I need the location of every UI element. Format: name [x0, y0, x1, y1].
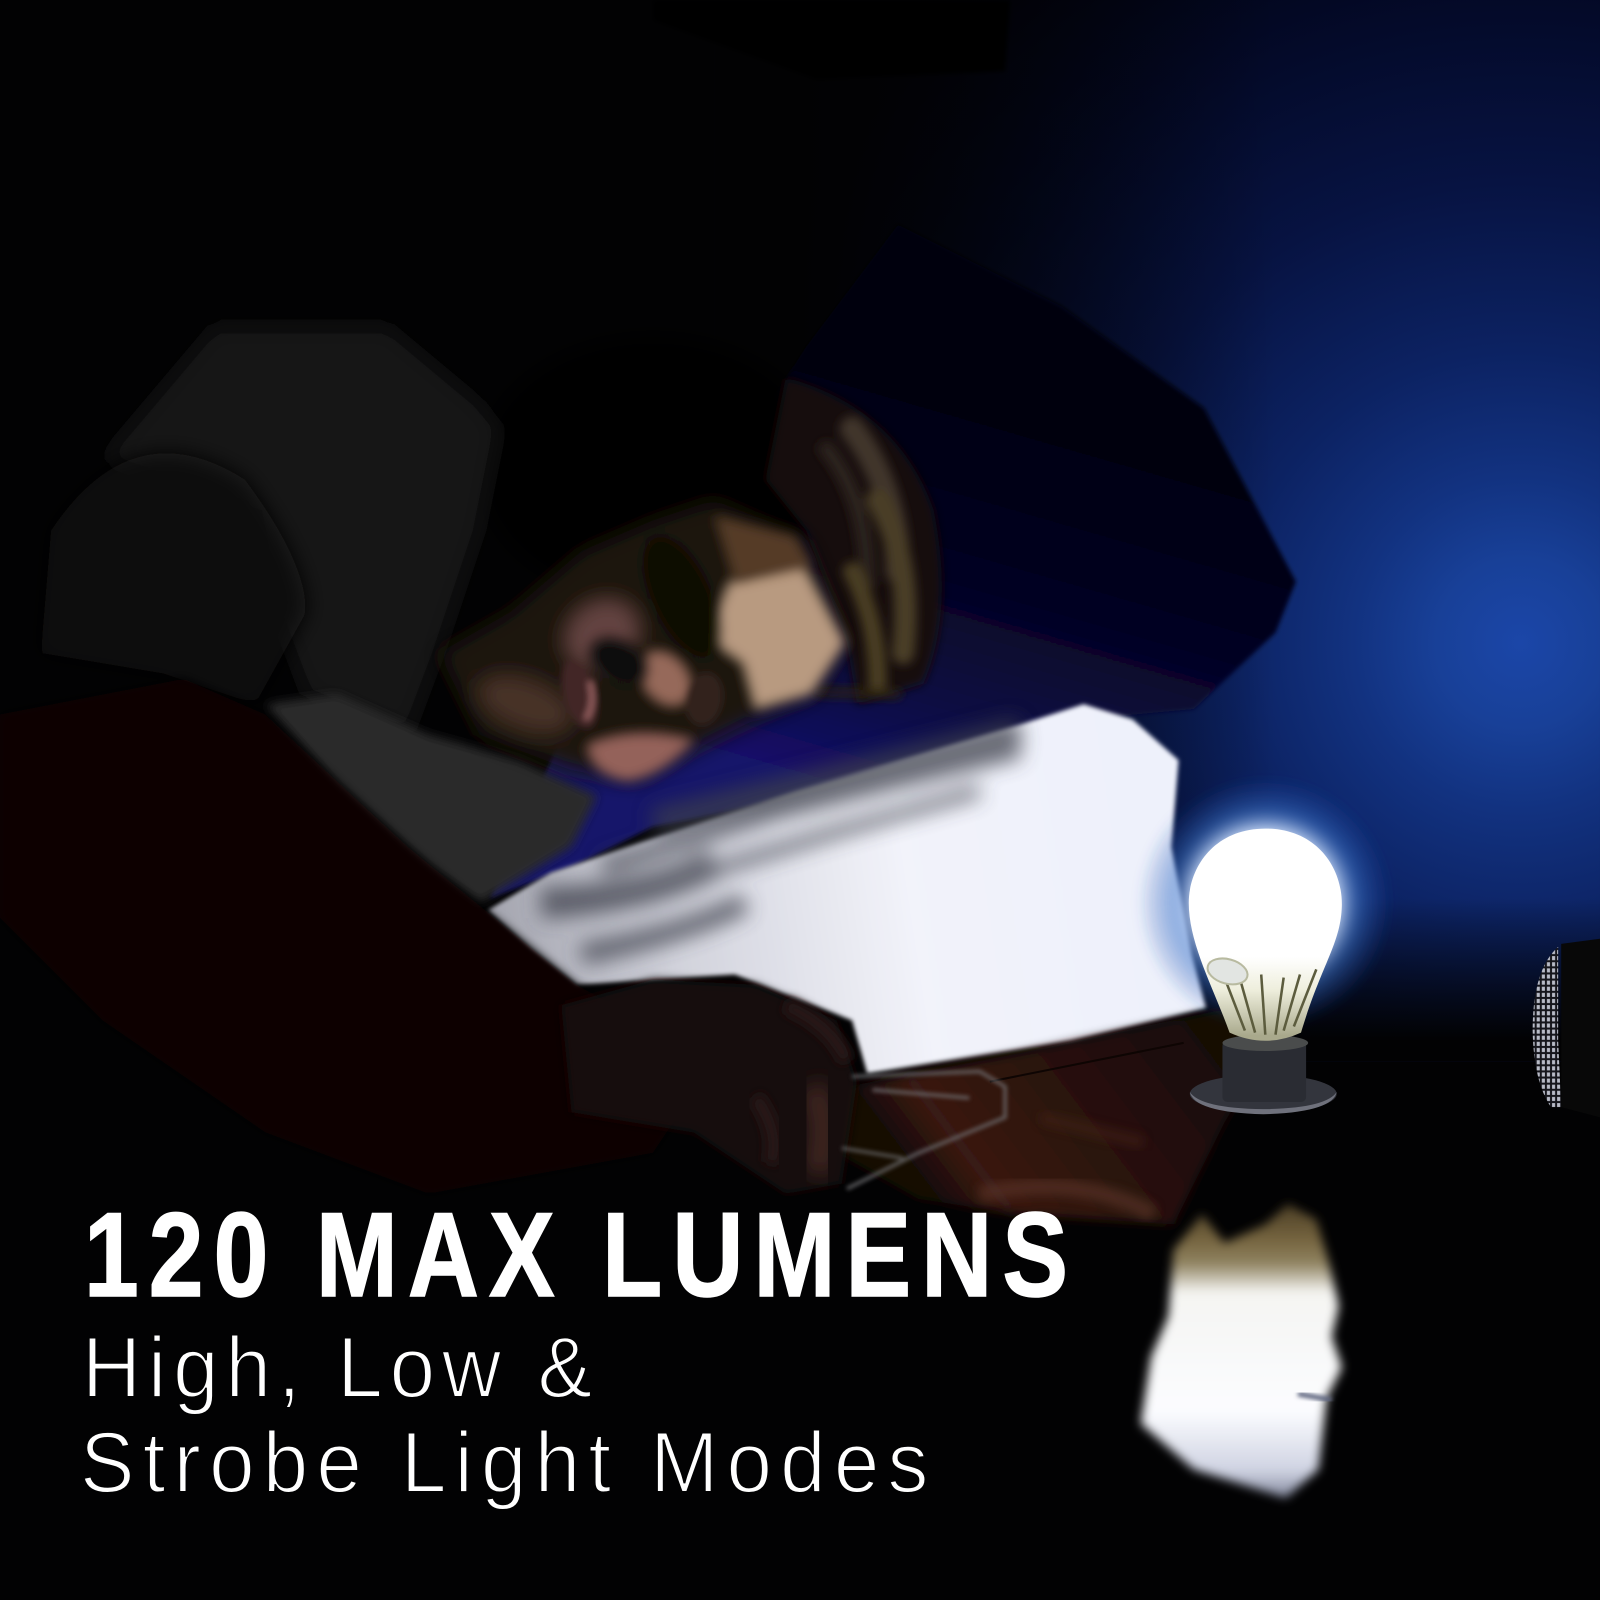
table reflection [1141, 1204, 1342, 1498]
bulb glass and ribs [1189, 829, 1342, 1041]
chin [587, 733, 694, 781]
sensor dome [1205, 954, 1250, 989]
lower eye [681, 670, 727, 728]
reflection body [1141, 1204, 1342, 1498]
lamp collar [1222, 1041, 1306, 1102]
mouth [556, 656, 603, 731]
table top [837, 1010, 1286, 1224]
hand [561, 980, 857, 1194]
face [439, 500, 847, 781]
navy pillow [490, 224, 1296, 898]
black head shadow area [480, 337, 827, 602]
blue wall glow [714, 0, 1600, 1061]
subtitle line 2: Strobe Light Modes [80, 1414, 928, 1510]
nose [628, 641, 702, 716]
bulb lamp [1138, 776, 1393, 1114]
white pillow [488, 704, 1206, 1073]
faint overhead object [653, 0, 1010, 80]
lamp base plate [1190, 1074, 1337, 1113]
bedding under arm [449, 1112, 571, 1163]
glasses [842, 1071, 1005, 1189]
hair [765, 378, 942, 704]
forehead light [706, 561, 845, 709]
headline [80, 1189, 1068, 1510]
shoulder and arm [0, 453, 714, 1194]
upper eye shadow [628, 526, 735, 668]
bulb halo [1138, 776, 1393, 1031]
title: 120 MAX LUMENS: 120 MAX LUMENS [84, 1189, 1068, 1322]
grey shirt [102, 327, 597, 903]
speaker [1533, 939, 1600, 1117]
upper cheek [549, 583, 655, 687]
subtitle [80, 1319, 928, 1510]
lower cheek [468, 662, 583, 746]
subtitle line 1: High, Low & [82, 1319, 592, 1415]
pillow shadow folds [541, 730, 1020, 954]
